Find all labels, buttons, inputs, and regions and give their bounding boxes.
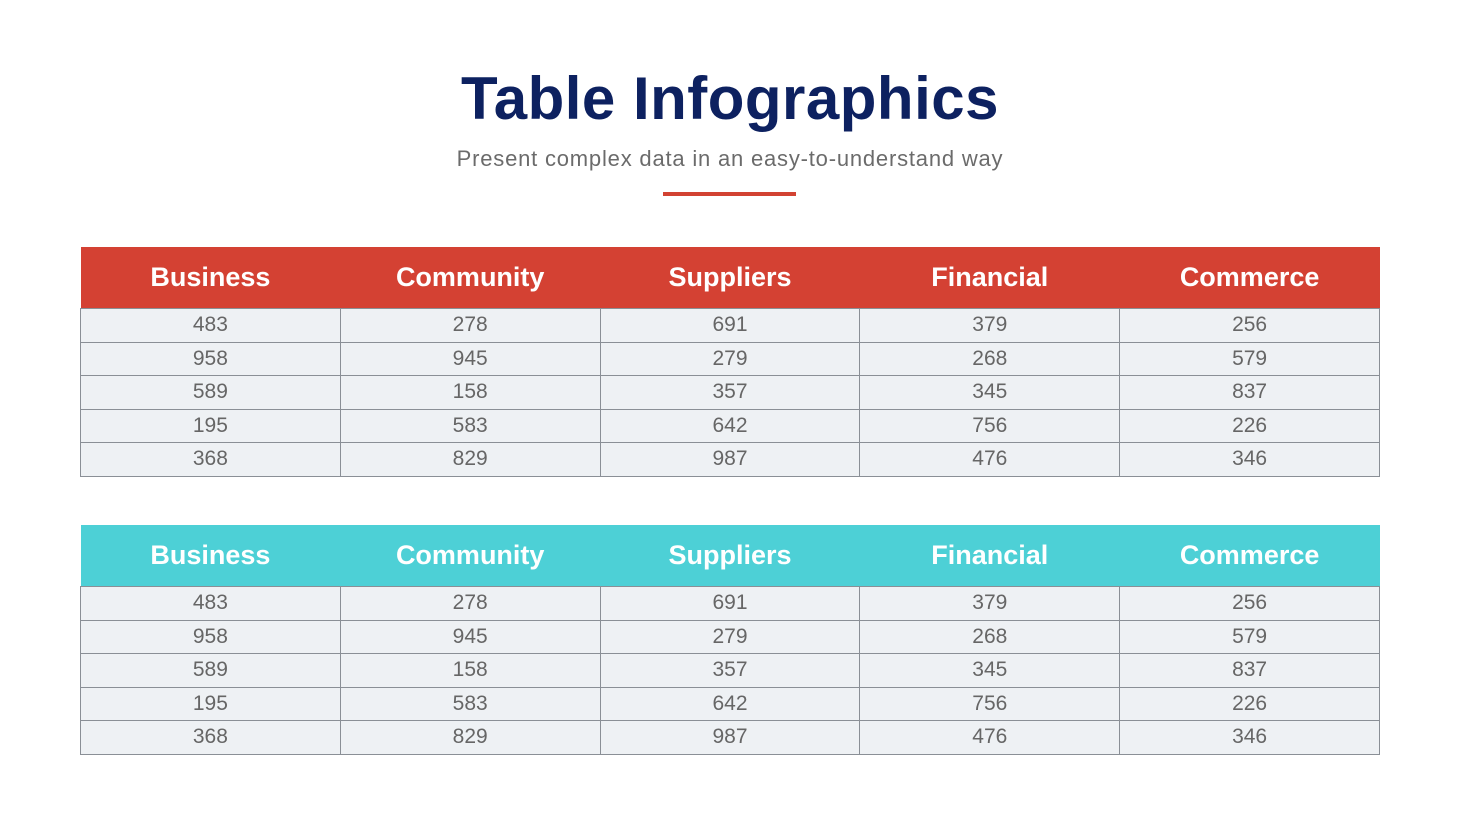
table: red: 268 [972,347,1007,370]
table: teal: 158 [453,658,488,681]
table: red: 256 [1232,313,1267,336]
table: red: 589 [193,380,228,403]
table: red: 278 [453,313,488,336]
table: teal: 756 [972,692,1007,715]
title: Table Infographics [461,65,999,132]
table: teal: 368 [193,725,228,748]
table: teal: 379 [972,591,1007,614]
table: teal: 483 [193,591,228,614]
table: teal: 256 [1232,591,1267,614]
table: red: 158 [453,380,488,403]
table: red: Commerce [1180,262,1319,292]
table: teal: Business [150,540,270,570]
table: teal: Suppliers [668,540,792,570]
table: teal: 195 [193,692,228,715]
table: red: Financial [931,262,1048,292]
table: red: 345 [972,380,1007,403]
table: red: 756 [972,414,1007,437]
table: red: 691 [712,313,748,336]
table: red: 476 [972,447,1007,470]
table: teal: 357 [712,658,748,681]
table: red: 958 [193,347,228,370]
table: teal: Community [396,540,544,570]
table: red: Suppliers [668,262,792,292]
table: teal: 829 [453,725,488,748]
table: teal: 345 [972,658,1007,681]
table: red: 945 [453,347,488,370]
table: red: 987 [712,447,748,470]
table: teal: 226 [1232,692,1267,715]
table: teal: 958 [193,625,228,648]
table: teal: Commerce [1180,540,1319,570]
table: teal: 579 [1232,625,1267,648]
table: red: 357 [712,380,748,403]
table: teal: 837 [1232,658,1267,681]
table: red: Business [150,262,270,292]
table: teal: 476 [972,725,1007,748]
table: red: 583 [453,414,488,437]
table: teal: 945 [453,625,488,648]
table: red: 279 [712,347,748,370]
table: red: 579 [1232,347,1267,370]
table: red: 642 [712,414,748,437]
table: teal: 268 [972,625,1007,648]
table: red: 226 [1232,414,1267,437]
table: red: 379 [972,313,1007,336]
subtitle: Present complex data in an easy-to-understand way [457,146,1003,171]
table: teal: 278 [453,591,488,614]
table: teal: 691 [712,591,748,614]
table: teal: 987 [712,725,748,748]
table: red: 837 [1232,380,1267,403]
table: red [80,247,1380,477]
table: teal: 346 [1232,725,1267,748]
table: red: 829 [453,447,488,470]
table: teal: Financial [931,540,1048,570]
table: teal: 583 [453,692,488,715]
table: red: 483 [193,313,228,336]
table: teal: 642 [712,692,748,715]
table: red: 368 [193,447,228,470]
table: teal [80,525,1380,755]
table: red: 195 [193,414,228,437]
table: red: 346 [1232,447,1267,470]
table: teal: 279 [712,625,748,648]
table: teal: 589 [193,658,228,681]
accent rule [663,192,796,196]
table: red: Community [396,262,544,292]
